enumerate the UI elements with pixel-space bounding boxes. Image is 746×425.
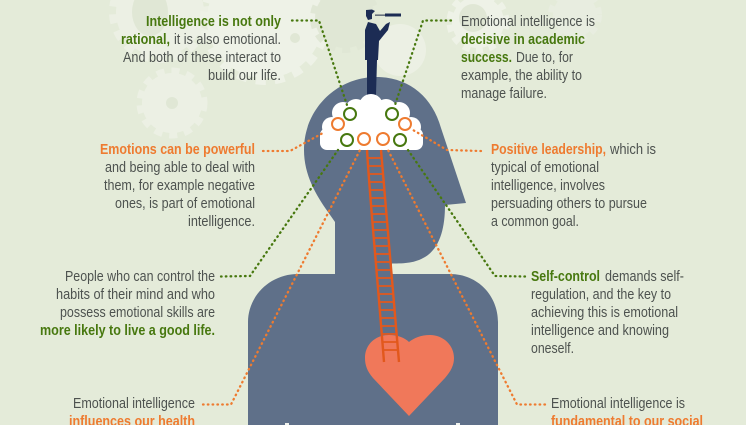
text: decisive in academic success xyxy=(461,13,595,102)
text: decisive in academic success: manage failure. xyxy=(461,85,547,102)
cloud brain xyxy=(320,94,423,150)
ladder xyxy=(367,150,399,362)
text: self-control xyxy=(531,268,684,357)
text: intelligence is not only rational: it is also emotional. xyxy=(174,31,281,48)
text: decisive in academic success: example, the ability to xyxy=(461,67,582,84)
text: people who can control: People who can control the xyxy=(65,268,215,285)
text: intelligence is not only rational: And both of these interact to xyxy=(123,49,281,66)
text: emotions can be powerful: and being able to deal with xyxy=(105,159,255,176)
text: positive leadership xyxy=(491,141,656,230)
text: positive leadership: Positive leadership, xyxy=(491,141,606,158)
text: self-control: Self-control xyxy=(531,268,600,285)
text: self-control: achieving this is emotional xyxy=(531,304,678,321)
text: intelligence is not only rational: Intelligence is not only xyxy=(146,13,282,30)
text: people who can control xyxy=(40,268,215,339)
text: influences our health xyxy=(69,395,195,425)
text: emotions can be powerful: ones, is part of emotional xyxy=(115,195,255,212)
text: emotions can be powerful: them, for example negative xyxy=(104,177,255,194)
dotted connectors orange xyxy=(203,130,545,404)
text: positive leadership: which is xyxy=(609,141,656,158)
background gears xyxy=(113,0,599,135)
text: intelligence is not only rational: rational, xyxy=(121,31,170,48)
human silhouette: head and torso xyxy=(248,77,498,425)
text: decisive in academic success: decisive in academic xyxy=(461,31,585,48)
text: positive leadership: persuading others to pursue xyxy=(491,195,647,212)
text: self-control: intelligence and knowing xyxy=(531,322,669,339)
text: positive leadership: a common goal. xyxy=(491,213,579,230)
text: influences our health: Emotional intelligence xyxy=(73,395,195,412)
text: self-control: oneself. xyxy=(531,340,574,357)
text: self-control: demands self- xyxy=(605,268,684,285)
text: people who can control: possess emotional skills are xyxy=(60,304,215,321)
text: self-control: regulation, and the key to xyxy=(531,286,671,303)
text: positive leadership: intelligence, involves xyxy=(491,177,605,194)
dotted connectors green xyxy=(221,20,525,276)
text: people who can control: more likely to live a good life. xyxy=(40,322,215,339)
text: emotions can be powerful: Emotions can be powerful xyxy=(100,141,255,158)
text: emotions can be powerful: intelligence. xyxy=(188,213,255,230)
text: people who can control: habits of their mind and who xyxy=(56,286,215,303)
text: fundamental to our social xyxy=(551,395,703,425)
text: intelligence is not only rational: build our life. xyxy=(208,67,281,84)
man with telescope xyxy=(365,10,401,95)
idea circles xyxy=(332,108,411,146)
heart xyxy=(365,335,454,416)
text: decisive in academic success: success. xyxy=(461,49,512,66)
text: emotions can be powerful xyxy=(100,141,255,230)
text: intelligence is not only rational xyxy=(121,13,282,84)
text: decisive in academic success: Emotional intelligence is xyxy=(461,13,595,30)
text: positive leadership: typical of emotional xyxy=(491,159,599,176)
text: decisive in academic success: Due to, for xyxy=(516,49,573,66)
text: fundamental to our social: Emotional intelligence is xyxy=(551,395,685,412)
partial white title marks at bottom xyxy=(285,423,460,425)
